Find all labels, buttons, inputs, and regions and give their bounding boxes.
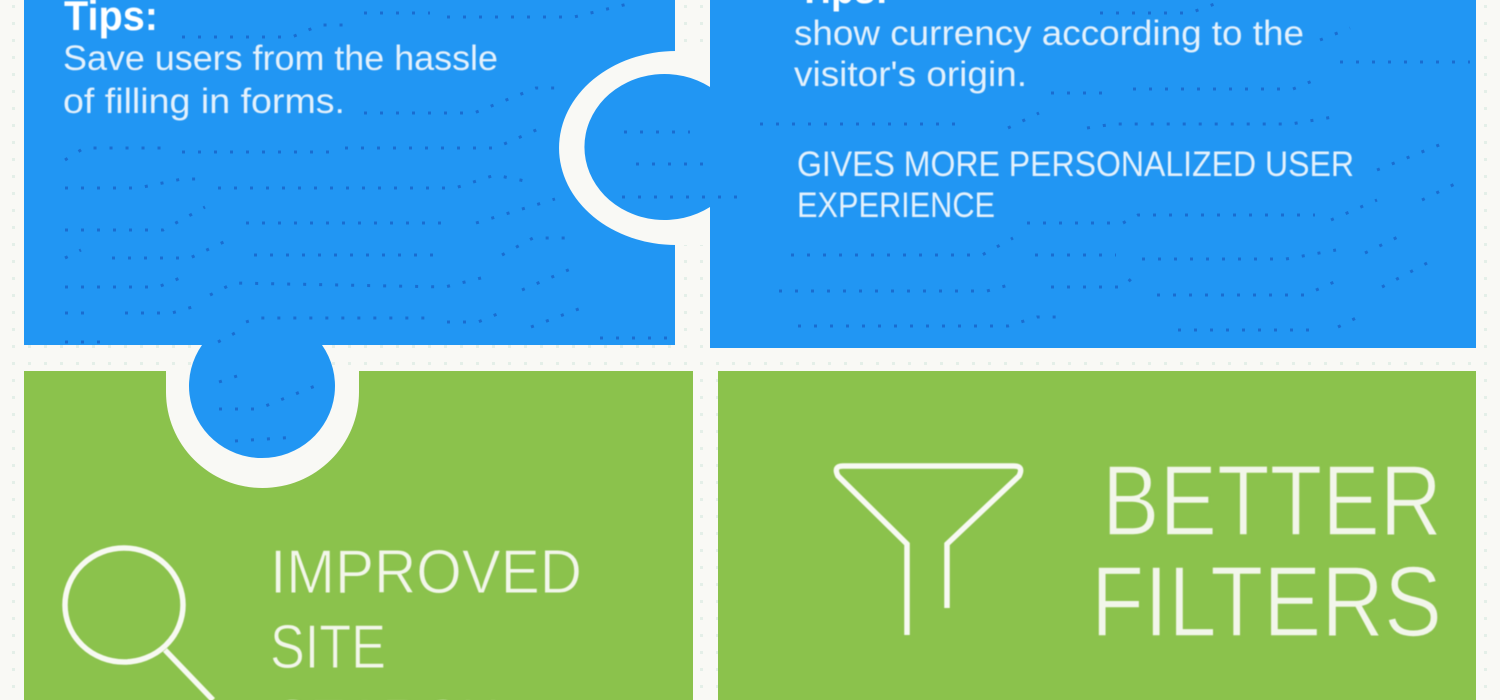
panel: autofill tips [24,0,675,458]
puzzle ring: lower connector [166,371,359,488]
heading: improved site search: IMPROVED [270,538,582,607]
puzzle ring: side connector [559,51,710,245]
icon: magnifying glass [65,548,213,700]
text block: left tips: Save users from the hassle [63,39,498,78]
text block: right tips: visitor's origin. [794,55,1027,94]
text block: left tips: of filling in forms. [63,82,345,121]
text block: left tips [63,0,498,121]
panel: better filters [718,371,1476,700]
dotted wave pattern [622,2,1470,330]
icon: funnel [836,466,1021,635]
dotted wave pattern [65,2,675,441]
text block: right tips: EXPERIENCE [797,186,995,225]
heading: improved site search: SITE [270,613,386,682]
panel: improved site search [24,371,693,700]
heading: improved site search [270,538,582,700]
text block: right tips [794,0,1354,225]
heading: better filters: BETTER [1102,445,1442,557]
text block: right tips: show currency according to the [794,14,1304,53]
heading: better filters: FILTERS [1091,546,1442,658]
text block: right tips: GIVES MORE PERSONALIZED USER [797,145,1354,184]
panel: currency tips [584,0,1476,348]
heading: better filters [1091,445,1442,658]
